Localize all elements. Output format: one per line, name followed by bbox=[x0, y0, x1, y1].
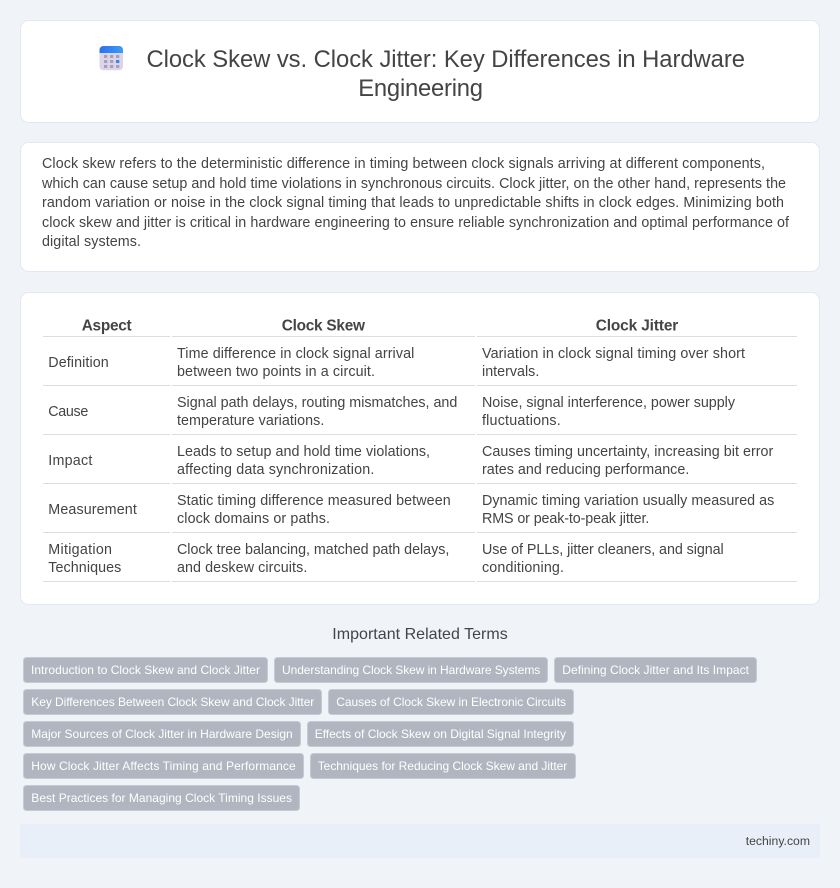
row: cause: Noise, signal interference, power supply bbox=[482, 395, 736, 411]
row: impact bbox=[48, 444, 774, 478]
table header row: Aspect bbox=[82, 318, 132, 334]
row: measurement: Dynamic timing variation usually measured as bbox=[482, 493, 774, 509]
summary paragraph: digital systems. bbox=[42, 234, 141, 250]
title: Engineering bbox=[358, 75, 483, 102]
summary paragraph bbox=[41, 156, 789, 250]
related terms tags: Best Practices for Managing Clock Timing Issues bbox=[31, 791, 292, 805]
related terms heading: Important Related Terms bbox=[332, 626, 508, 643]
summary paragraph: which can cause setup and hold time violations in synchronous circuits. Clock jitter, on the other hand, represents the bbox=[41, 176, 786, 192]
row: cause: Cause bbox=[48, 404, 88, 420]
related terms tags: How Clock Jitter Affects Timing and Performance bbox=[31, 759, 296, 773]
table header row bbox=[82, 318, 678, 334]
row: mitigation techniques: Use of PLLs, jitter cleaners, and signal bbox=[482, 542, 724, 558]
row: cause: fluctuations. bbox=[482, 413, 561, 429]
row: impact: Impact bbox=[48, 453, 92, 469]
row: measurement: clock domains or paths. bbox=[177, 511, 330, 527]
related terms tags: Key Differences Between Clock Skew and Clock Jitter bbox=[31, 695, 314, 709]
row: mitigation techniques: Techniques bbox=[48, 560, 121, 576]
row: measurement bbox=[48, 493, 774, 527]
row: impact: Causes timing uncertainty, increasing bit error bbox=[482, 444, 774, 460]
title bbox=[146, 46, 745, 102]
row: measurement: Measurement bbox=[48, 502, 137, 518]
row: mitigation techniques: and deskew circuits. bbox=[177, 560, 307, 576]
comparison table bbox=[43, 318, 797, 582]
row: definition: between two points in a circuit. bbox=[177, 364, 375, 380]
footer source text: techiny.com bbox=[746, 834, 810, 848]
summary paragraph: Clock skew refers to the deterministic difference in timing between clock signals arriving at different components, bbox=[42, 156, 765, 172]
row: mitigation techniques: conditioning. bbox=[482, 560, 564, 576]
row: definition: Definition bbox=[48, 355, 109, 371]
row: impact: Leads to setup and hold time violations, bbox=[177, 444, 430, 460]
row: definition: Time difference in clock signal arrival bbox=[177, 346, 414, 362]
related terms tags: Effects of Clock Skew on Digital Signal Integrity bbox=[315, 727, 566, 741]
row: cause: Signal path delays, routing mismatches, and bbox=[177, 395, 457, 411]
related terms tags bbox=[24, 658, 756, 810]
row: impact: affecting data synchronization. bbox=[177, 462, 374, 478]
summary paragraph: random variation or noise in the clock signal timing that leads to unpredictable shifts in clock edges. Minimizing both bbox=[42, 195, 784, 211]
related terms tags: Major Sources of Clock Jitter in Hardware Design bbox=[31, 727, 293, 741]
header card bbox=[20, 20, 820, 122]
summary card bbox=[20, 142, 820, 272]
title: Clock Skew vs. Clock Jitter: Key Differences in Hardware bbox=[146, 46, 745, 73]
table card bbox=[20, 292, 820, 604]
related terms tags: Techniques for Reducing Clock Skew and Jitter bbox=[318, 759, 567, 773]
row: cause: temperature variations. bbox=[177, 413, 324, 429]
icon: calendar bbox=[100, 46, 123, 70]
related terms tags: Causes of Clock Skew in Electronic Circuits bbox=[336, 695, 566, 709]
row: measurement: RMS or peak-to-peak jitter. bbox=[482, 511, 649, 527]
row: mitigation techniques bbox=[48, 542, 724, 576]
row: definition bbox=[48, 346, 745, 380]
row: mitigation techniques: Clock tree balancing, matched path delays, bbox=[177, 542, 449, 558]
related terms tags: Understanding Clock Skew in Hardware Systems bbox=[282, 663, 540, 677]
row: mitigation techniques: Mitigation bbox=[48, 542, 112, 558]
row: impact: rates and reducing performance. bbox=[482, 462, 689, 478]
table header row: Clock Skew bbox=[282, 318, 365, 334]
row: cause bbox=[48, 395, 736, 429]
row: definition: intervals. bbox=[482, 364, 539, 380]
related terms tags: Defining Clock Jitter and Its Impact bbox=[562, 663, 750, 677]
footer bbox=[20, 824, 820, 858]
related terms tags: Introduction to Clock Skew and Clock Jitter bbox=[31, 663, 260, 677]
table header row: Clock Jitter bbox=[596, 318, 678, 334]
row: definition: Variation in clock signal timing over short bbox=[482, 346, 745, 362]
row: measurement: Static timing difference measured between bbox=[177, 493, 451, 509]
summary paragraph: clock skew and jitter is critical in hardware engineering to ensure reliable synchronization and optimal performance of bbox=[42, 215, 789, 231]
